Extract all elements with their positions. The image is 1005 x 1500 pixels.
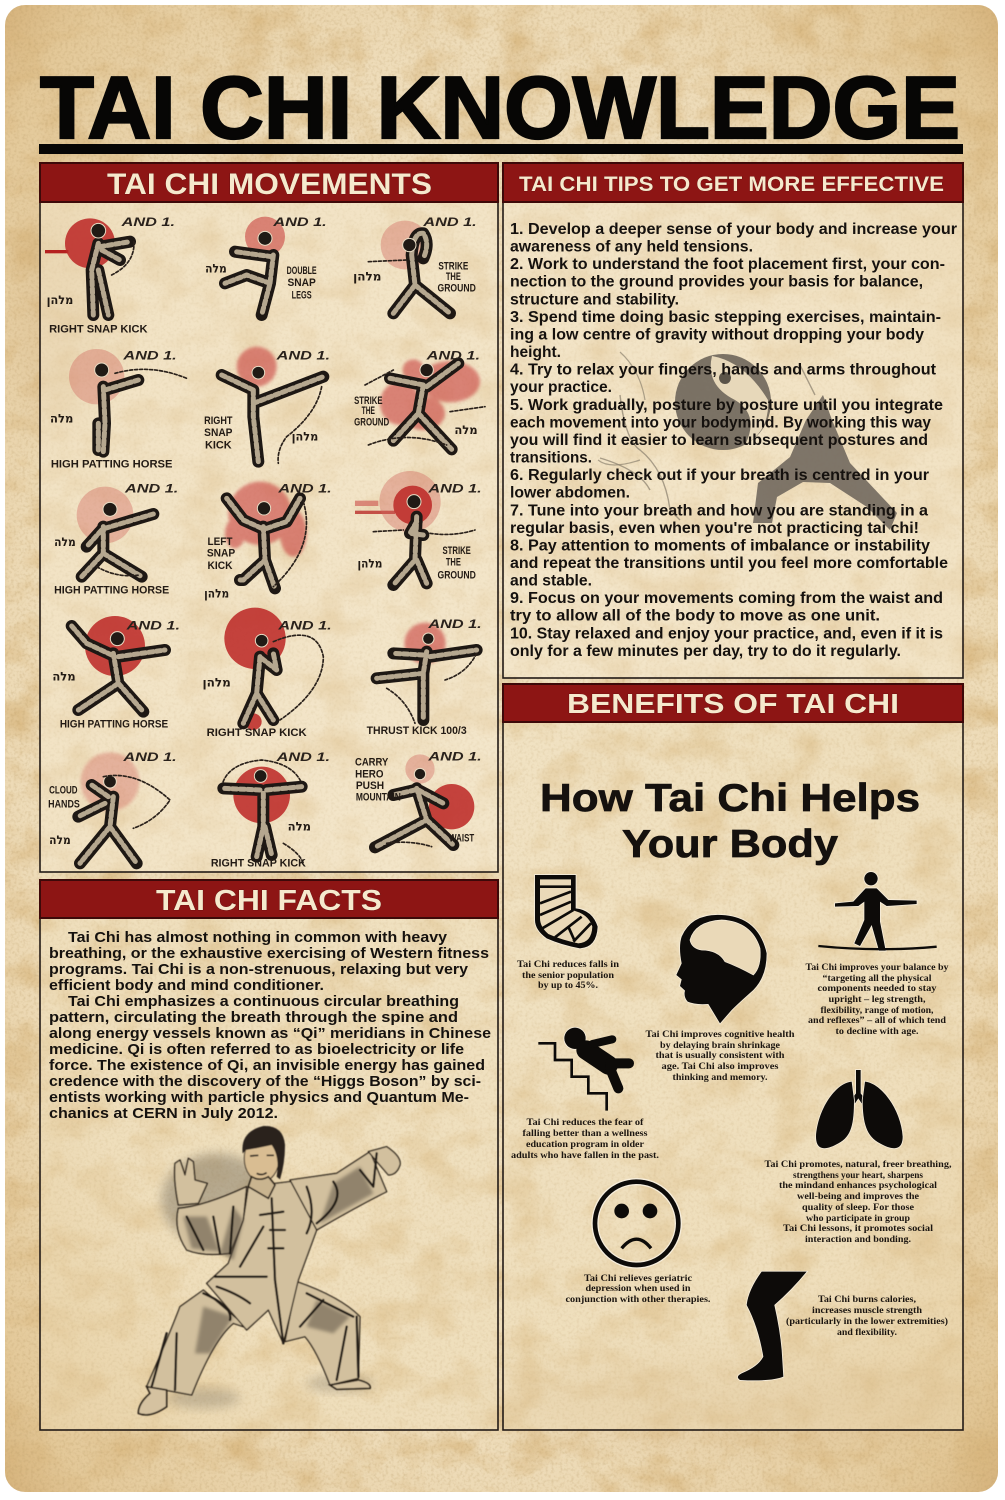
figure: cloud hands bbox=[48, 750, 177, 863]
caption: breathing: well-being and improves the bbox=[797, 1191, 920, 1202]
figure: high patting horse 2 bbox=[54, 482, 178, 597]
text block: tips list: lower abdomen. bbox=[510, 485, 630, 502]
figure: right snap kick 3: AND 1. bbox=[277, 618, 332, 632]
caption: balance: Tai Chi improves your balance by bbox=[806, 962, 949, 973]
figure: left snap kick bbox=[204, 482, 332, 600]
figure: left snap kick: KICK bbox=[207, 560, 233, 572]
illustration: woman in tai chi stance bbox=[138, 1126, 400, 1415]
text block: tips list: ing a low centre of gravity without dropping your body bbox=[510, 326, 924, 344]
caption: falls: Tai Chi reduces falls in bbox=[517, 959, 620, 970]
caption: fear of falling: adults who have fallen in the past. bbox=[511, 1150, 659, 1161]
text block: tips list: 8. Pay attention to moments of imbalance or instability bbox=[510, 537, 930, 554]
caption: calories: increases muscle strength bbox=[812, 1305, 923, 1316]
figure: carry hero push mountain: PUSH bbox=[356, 780, 384, 792]
figure: carry hero push mountain: WAIST bbox=[449, 833, 474, 845]
text block: facts: pattern, circulating the breath through the spine and bbox=[49, 1010, 458, 1026]
caption: fear of falling: Tai Chi reduces the fear of bbox=[526, 1117, 644, 1128]
caption: cognitive health bbox=[646, 1029, 795, 1083]
figure: right snap kick 3: מלהן bbox=[202, 676, 231, 690]
text block: facts: programs. Tai Chi is a non-strenuous, relaxing but very bbox=[49, 962, 469, 978]
title rule bbox=[39, 144, 963, 154]
icon: person falling down stairs bbox=[538, 1028, 629, 1111]
text block: tips list: 10. Stay relaxed and enjoy your practice, and, even if it is bbox=[510, 625, 943, 642]
figure: strike the ground 2: מלה bbox=[454, 423, 478, 437]
text block: tips list: 2. Work to understand the foot placement first, your con- bbox=[510, 256, 945, 273]
caption: calories: and flexibility. bbox=[837, 1327, 897, 1338]
figure: double snap legs: AND 1. bbox=[272, 215, 327, 229]
caption: balance: components needed to stay bbox=[818, 983, 937, 994]
caption: calories: Tai Chi burns calories, bbox=[818, 1294, 917, 1305]
caption: breathing: Tai Chi lessons, it promotes social bbox=[783, 1223, 933, 1234]
text block: tips list: 1. Develop a deeper sense of your body and increase your bbox=[510, 221, 957, 238]
caption: falls: by up to 45%. bbox=[538, 980, 598, 991]
figure: thrust kick: AND 1. bbox=[427, 617, 482, 631]
text block: tips list: awareness of any held tensions. bbox=[510, 239, 753, 256]
figure: double snap legs: LEGS bbox=[292, 289, 312, 301]
figure: strike the ground 1: GROUND bbox=[437, 283, 476, 295]
watermark: figure holding yin yang bbox=[598, 352, 897, 530]
figure: cloud hands: HANDS bbox=[48, 798, 80, 810]
heading: how tai chi helps your body: How Tai Chi Helps bbox=[540, 777, 920, 820]
title: TAI CHI KNOWLEDGE bbox=[40, 58, 960, 157]
icon: sad face bbox=[595, 1182, 678, 1265]
caption: breathing bbox=[764, 1159, 952, 1245]
figure: right snap kick 2 bbox=[204, 347, 330, 463]
caption: depression bbox=[566, 1273, 710, 1305]
figure: left snap kick: LEFT bbox=[207, 536, 233, 548]
icon: head with brain bbox=[676, 915, 767, 1023]
caption: balance: upright – leg strength, bbox=[828, 994, 926, 1005]
header: benefits: BENEFITS OF TAI CHI bbox=[567, 688, 899, 719]
figure: high patting horse 3 bbox=[52, 616, 180, 731]
caption: breathing: strengthens your heart, sharpens bbox=[793, 1170, 923, 1181]
figure: high patting horse 1: AND 1. bbox=[122, 348, 177, 362]
caption: breathing: who participate in group bbox=[806, 1213, 910, 1224]
figure: strike the ground 1: STRIKE bbox=[438, 260, 469, 272]
caption: balance: to decline with age. bbox=[836, 1026, 918, 1037]
caption: depression: Tai Chi relieves geriatric bbox=[584, 1273, 693, 1284]
caption: depression: conjunction with other therapies. bbox=[566, 1294, 710, 1305]
figure: strike the ground 3: GROUND bbox=[437, 569, 476, 581]
figure: right snap kick 1: מלהן bbox=[47, 293, 73, 307]
figure: strike the ground 2 bbox=[354, 348, 485, 449]
figure: right snap kick 4: RIGHT SNAP KICK bbox=[211, 858, 307, 870]
text block: facts: credence with the discovery of the “Higgs Boson” by sci- bbox=[49, 1074, 481, 1090]
text block: facts: force. The existence of Qi, an invisible energy has gained bbox=[49, 1058, 485, 1074]
caption: breathing: Tai Chi promotes, natural, freer breathing, bbox=[764, 1159, 952, 1170]
text block: tips list: only for a few minutes per day, try to do it regularly. bbox=[510, 643, 901, 660]
caption: fear of falling bbox=[511, 1117, 659, 1161]
figure: right snap kick 4: מלה bbox=[288, 820, 311, 834]
figure: high patting horse 3: AND 1. bbox=[125, 618, 180, 632]
figure: right snap kick 1 bbox=[45, 215, 175, 336]
text block: tips list: height. bbox=[510, 344, 561, 361]
figure: strike the ground 1: מלהן bbox=[353, 270, 381, 284]
header: movements bbox=[40, 163, 498, 202]
figure: strike the ground 3 bbox=[355, 471, 482, 585]
figure: strike the ground 3: THE bbox=[446, 557, 461, 569]
icon: leg bbox=[738, 1272, 807, 1380]
figure: thrust kick bbox=[367, 617, 482, 737]
figure: right snap kick 2: מלהן bbox=[292, 430, 318, 444]
figure: right snap kick 2: RIGHT bbox=[204, 415, 233, 427]
figure: right snap kick 3: RIGHT SNAP KICK bbox=[207, 727, 307, 739]
figure: strike the ground 3: STRIKE bbox=[442, 545, 471, 557]
figure: double snap legs: מלה bbox=[205, 262, 227, 276]
caption: balance bbox=[806, 962, 949, 1037]
text block: tips list: and stable. bbox=[510, 573, 592, 590]
figure: double snap legs bbox=[205, 215, 327, 315]
text block: tips list: 9. Focus on your movements coming from the waist and bbox=[510, 590, 943, 607]
text block: tips list: transitions. bbox=[510, 450, 592, 466]
text block: tips list: nection to the ground provides your basis for balance, bbox=[510, 274, 923, 291]
figure: carry hero push mountain: CARRY bbox=[355, 757, 389, 769]
figure: double snap legs: DOUBLE bbox=[287, 265, 317, 277]
figure: right snap kick 4: AND 1. bbox=[275, 750, 330, 764]
figure: right snap kick 2: SNAP bbox=[204, 427, 233, 439]
figure: carry hero push mountain: MOUNTAIN bbox=[356, 792, 401, 804]
text block: facts: medicine. Qi is often referred to as bioelectricity or life bbox=[49, 1042, 464, 1058]
caption: balance: and reflexes” – all of which tend bbox=[808, 1015, 947, 1026]
text block: tips list: regular basis, even when you're not practicing tai chi! bbox=[510, 520, 919, 537]
panel: tai chi tips bbox=[503, 163, 963, 678]
text block: tips list: 4. Try to relax your fingers, hands and arms throughout bbox=[510, 362, 936, 379]
figure: right snap kick 4 bbox=[211, 750, 330, 870]
caption: fear of falling: falling better than a wellness bbox=[522, 1128, 648, 1139]
figure: high patting horse 3: מלה bbox=[52, 670, 76, 684]
icon: person balancing on rope bbox=[818, 872, 937, 951]
text block: tips list: your practice. bbox=[510, 379, 612, 396]
figure: strike the ground 2: THE bbox=[362, 405, 375, 417]
figure: strike the ground 2: AND 1. bbox=[425, 348, 480, 362]
caption: cognitive health: age. Tai Chi also improves bbox=[662, 1061, 779, 1072]
text block: facts bbox=[49, 930, 491, 1122]
text block: facts: breathing, or the exhaustive exercising of Western fitness bbox=[49, 946, 489, 962]
figure: right snap kick 2: KICK bbox=[205, 439, 232, 451]
text block: tips list: structure and stability. bbox=[510, 291, 679, 308]
figure: high patting horse 2: HIGH PATTING HORSE bbox=[54, 585, 170, 597]
panel: tai chi movements bbox=[40, 163, 498, 872]
figure: strike the ground 1 bbox=[353, 215, 477, 313]
figure: high patting horse 2: AND 1. bbox=[124, 482, 178, 496]
figure: high patting horse 1: מלה bbox=[50, 412, 73, 426]
figure: left snap kick: AND 1. bbox=[277, 482, 332, 496]
figure: high patting horse 3: HIGH PATTING HORSE bbox=[60, 719, 169, 731]
caption: calories: (particularly in the lower extremities) bbox=[786, 1316, 948, 1327]
figure: high patting horse 1: HIGH PATTING HORSE bbox=[51, 459, 173, 471]
figure: right snap kick 2: AND 1. bbox=[275, 348, 330, 362]
caption: breathing: interaction and bonding. bbox=[805, 1234, 911, 1245]
figure: right snap kick 1: RIGHT SNAP KICK bbox=[49, 324, 148, 336]
figure: left snap kick: SNAP bbox=[207, 548, 236, 560]
figure: strike the ground 1: AND 1. bbox=[422, 215, 477, 229]
figure: left snap kick: מלהן bbox=[204, 586, 229, 600]
text block: tips list: 5. Work gradually, posture by posture until you integrate bbox=[510, 397, 943, 414]
figure: carry hero push mountain: HERO bbox=[355, 768, 384, 780]
header: benefits bbox=[503, 684, 963, 722]
text block: tips list: try to allow all of the body to move as one unit. bbox=[510, 608, 880, 625]
header: tips bbox=[503, 163, 963, 202]
text block: tips list: 3. Spend time doing basic stepping exercises, maintain- bbox=[510, 309, 941, 326]
header: facts bbox=[40, 880, 498, 918]
panel: benefits of tai chi bbox=[503, 684, 963, 1430]
figure: high patting horse 2: מלה bbox=[54, 535, 76, 549]
figure: high patting horse 1 bbox=[50, 348, 187, 471]
figure: right snap kick 3 bbox=[202, 608, 332, 739]
text block: facts: efficient body and mind conditioner. bbox=[49, 978, 324, 994]
caption: breathing: the mindand enhances psychological bbox=[779, 1180, 937, 1191]
icon: foot cast bbox=[535, 875, 598, 948]
figure: strike the ground 2: GROUND bbox=[354, 417, 389, 429]
header: facts: TAI CHI FACTS bbox=[156, 885, 382, 917]
text block: facts: Tai Chi has almost nothing in common with heavy bbox=[68, 930, 448, 946]
text block: tips list bbox=[510, 221, 957, 660]
caption: calories bbox=[786, 1294, 948, 1338]
caption: cognitive health: that is usually consistent with bbox=[656, 1050, 785, 1061]
figure: cloud hands: CLOUD bbox=[49, 784, 77, 796]
figure: strike the ground 1: THE bbox=[446, 271, 461, 283]
caption: depression: depression when used in bbox=[586, 1283, 691, 1294]
text block: facts: entists working with particle physics and Quantum Me- bbox=[49, 1090, 469, 1106]
text block: facts: along energy vessels known as “Qi” meridians in Chinese bbox=[49, 1026, 491, 1042]
figure: strike the ground 3: AND 1. bbox=[427, 482, 482, 496]
figure: cloud hands: מלה bbox=[49, 833, 71, 847]
panel: tai chi facts bbox=[40, 880, 498, 1430]
text block: tips list: you will find it easier to learn subsequent postures and bbox=[510, 432, 928, 449]
heading: how tai chi helps your body bbox=[540, 777, 920, 866]
text block: facts: Tai Chi emphasizes a continuous circular breathing bbox=[68, 994, 459, 1010]
text block: tips list: 7. Tune into your breath and how you are standing in a bbox=[510, 502, 928, 519]
figure: thrust kick: THRUST KICK 100/3 bbox=[367, 725, 467, 737]
text block: tips list: 6. Regularly check out if your breath is centred in your bbox=[510, 467, 929, 484]
caption: falls: the senior population bbox=[522, 970, 615, 981]
figure: carry hero push mountain bbox=[355, 750, 482, 847]
text block: tips list: and repeat the transitions until you feel more comfortable bbox=[510, 555, 948, 572]
figure: right snap kick 1: AND 1. bbox=[120, 215, 175, 229]
caption: balance: flexibility, range of motion, bbox=[820, 1005, 934, 1016]
caption: fear of falling: education program in older bbox=[526, 1139, 645, 1150]
caption: breathing: quality of sleep. For those bbox=[802, 1202, 915, 1213]
figure: double snap legs: SNAP bbox=[287, 277, 316, 289]
header: tips: TAI CHI TIPS TO GET MORE EFFECTIVE bbox=[519, 172, 944, 196]
icon: lungs bbox=[816, 1070, 903, 1148]
caption: cognitive health: Tai Chi improves cognitive health bbox=[646, 1029, 795, 1040]
caption: cognitive health: by delaying brain shrinkage bbox=[660, 1040, 781, 1051]
header: movements: TAI CHI MOVEMENTS bbox=[107, 168, 432, 201]
figure: strike the ground 3: מלהן bbox=[357, 556, 382, 570]
caption: balance: “targeting all the physical bbox=[822, 973, 932, 984]
text block: facts: chanics at CERN in July 2012. bbox=[49, 1106, 278, 1122]
text block: tips list: each movement into your bodymind. By working this way bbox=[510, 414, 931, 431]
caption: falls bbox=[517, 959, 620, 991]
icons and captions bbox=[511, 872, 952, 1380]
figure: cloud hands: AND 1. bbox=[122, 750, 177, 764]
movement figures grid bbox=[45, 215, 485, 870]
figure: carry hero push mountain: AND 1. bbox=[427, 750, 482, 764]
figure: strike the ground 2: STRIKE bbox=[354, 395, 383, 407]
caption: cognitive health: thinking and memory. bbox=[672, 1072, 768, 1083]
heading: how tai chi helps your body: Your Body bbox=[622, 823, 839, 866]
